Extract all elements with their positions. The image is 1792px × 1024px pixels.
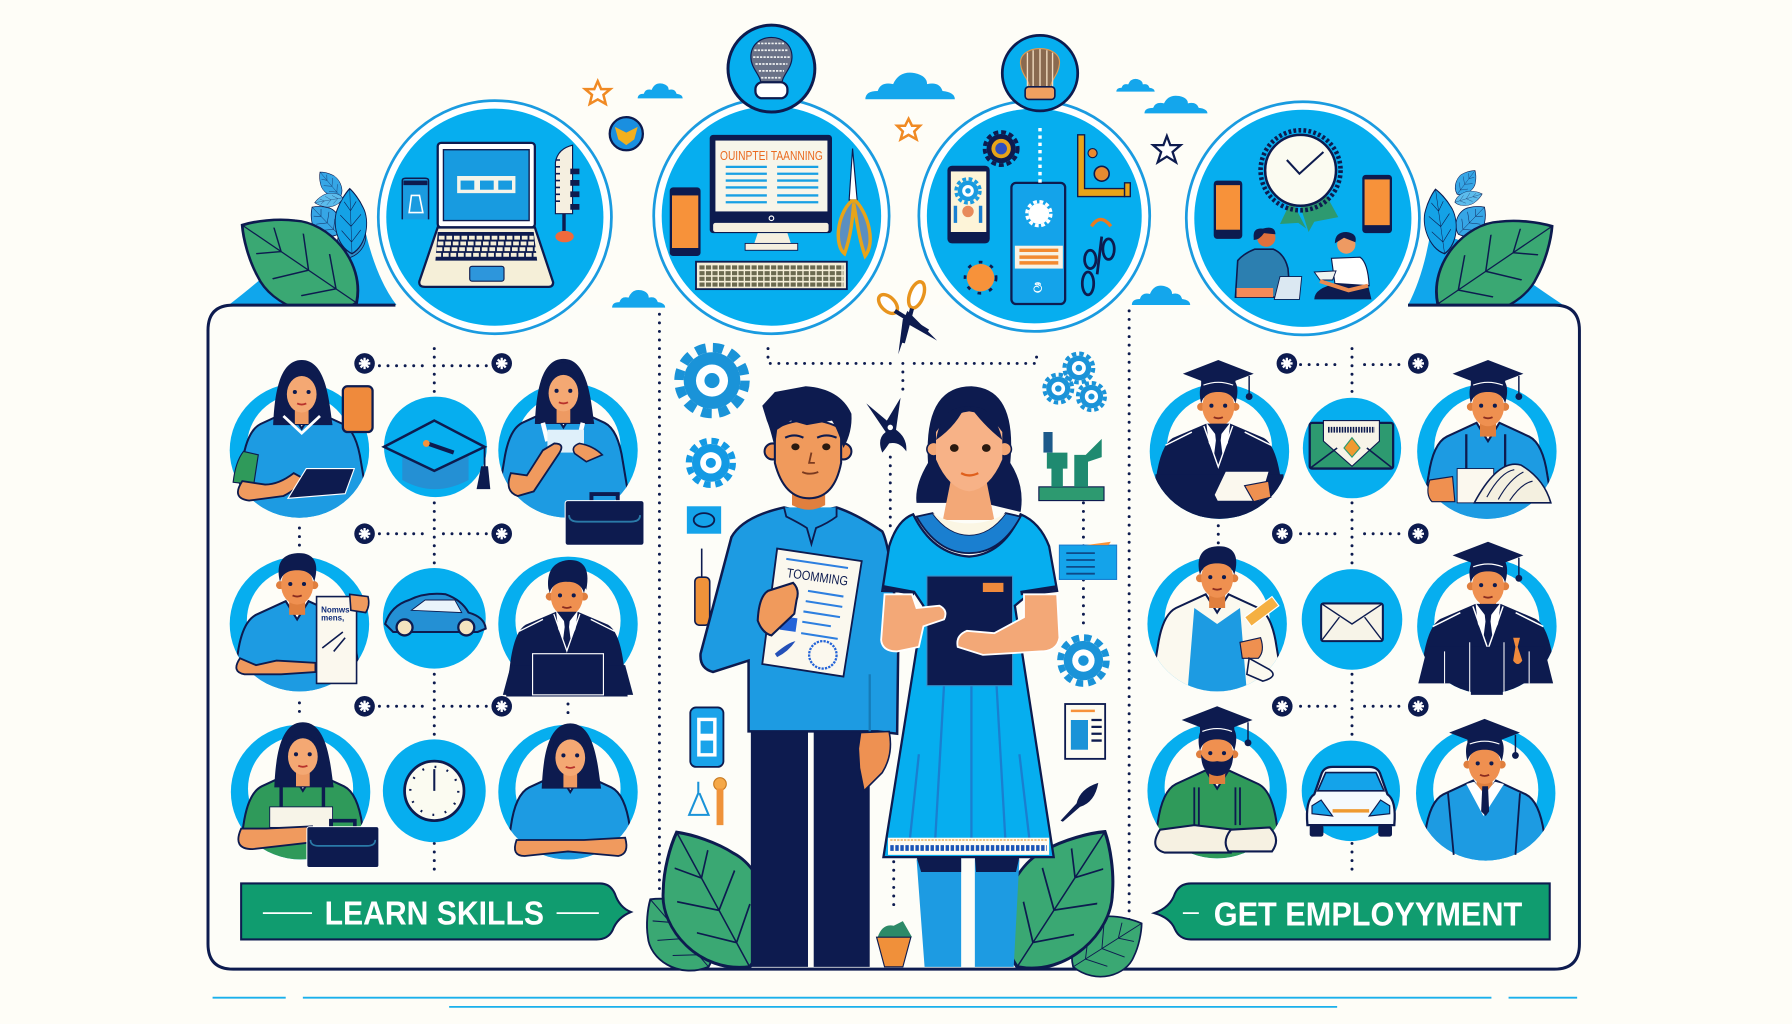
man head — [762, 386, 852, 510]
person: graduate in suit with notepad — [1150, 360, 1289, 520]
woman arms — [881, 594, 946, 651]
sleeve bands — [883, 587, 1057, 593]
dotted connectors — [299, 311, 1403, 931]
infographic canvas — [206, 24, 1581, 1008]
clippers icon — [866, 398, 906, 453]
woman hair — [916, 386, 1022, 512]
learn skills banner — [241, 883, 631, 939]
man trousers — [751, 731, 870, 967]
icon: wall clock — [383, 739, 486, 842]
monitor: OUINPTEI TAANNING — [720, 148, 823, 163]
training circle 2: desktop computer — [654, 98, 889, 334]
document — [1065, 704, 1105, 759]
orange phones — [1214, 175, 1392, 239]
person: graduate with open book — [1417, 360, 1557, 519]
certificate: TOOMMING — [786, 565, 849, 589]
woman neck — [943, 480, 994, 520]
person: man in suit with laptop — [498, 557, 638, 696]
tall phone: ටී — [1033, 281, 1043, 296]
flower pot — [877, 921, 912, 967]
person: woman with folded hands — [498, 723, 638, 860]
icon: green envelope — [1303, 398, 1401, 498]
man shirt — [700, 507, 898, 734]
woman dress — [882, 514, 1057, 857]
person: graduate in sweater vest — [1416, 718, 1556, 861]
top left leaf cluster — [219, 166, 397, 337]
woman character — [881, 386, 1059, 967]
machine — [1039, 432, 1104, 501]
laptop — [419, 143, 553, 287]
person: student in white coat with pencil — [1147, 546, 1287, 692]
training circle 3: mobile tools — [919, 101, 1150, 331]
man hands — [758, 583, 798, 635]
ruler tool — [555, 145, 579, 242]
orange gear — [965, 262, 996, 293]
top scissors — [875, 280, 937, 354]
dress border — [888, 838, 1049, 855]
icon: white envelope — [1302, 569, 1402, 670]
tablet — [927, 576, 1013, 686]
person: woman in apron with toolbox — [230, 722, 378, 867]
certificate — [762, 549, 862, 677]
man character — [700, 386, 898, 967]
keyboard — [696, 262, 847, 289]
phone — [670, 187, 701, 256]
radio — [1059, 542, 1117, 579]
connector flowers — [354, 353, 1429, 717]
tall phone — [1011, 183, 1065, 304]
paper: mens, — [321, 614, 344, 623]
person: woman with tablet and phone — [230, 360, 374, 518]
woman legs — [917, 859, 1019, 967]
learner with laptop — [1235, 228, 1302, 299]
icon: graduation cap — [384, 397, 490, 497]
small scissors — [1082, 219, 1114, 295]
feather — [1061, 783, 1098, 822]
person: graduate in dark suit — [1417, 542, 1558, 702]
person: bearded graduate with crossed arms — [1147, 706, 1287, 858]
small phone — [402, 178, 429, 219]
bulb badge 1 — [728, 25, 815, 112]
top right leaf cluster — [1408, 165, 1575, 338]
side icons: left of couple — [679, 348, 745, 825]
icon: front view car — [1302, 741, 1400, 841]
get employment column — [1147, 360, 1557, 861]
bulb badge 2 — [1002, 35, 1078, 111]
paper: Nomws — [321, 606, 350, 615]
phone with gear — [947, 166, 990, 243]
person: man pointing at paper — [230, 553, 370, 692]
training circle 4: clock and learners — [1186, 102, 1419, 335]
get employment banner — [1154, 883, 1550, 939]
icon: blue car — [383, 568, 486, 669]
pliers — [838, 149, 870, 256]
center bottom leaves — [626, 805, 1157, 994]
side icons: right of couple — [1039, 354, 1117, 822]
woman face — [927, 402, 1011, 491]
learner with tablet — [1314, 232, 1371, 299]
bottom rules — [213, 998, 1577, 1007]
get employment banner: GET EMPLOYYMENT — [1214, 897, 1522, 934]
learn skills column — [230, 359, 644, 912]
decorative clouds and stars — [585, 73, 1207, 308]
monitor — [710, 135, 832, 250]
clock medal — [1261, 130, 1341, 232]
learn skills banner: LEARN SKILLS — [325, 896, 544, 933]
person: woman with briefcase — [497, 359, 644, 547]
navy gear — [985, 132, 1018, 165]
training circle 1: laptop — [378, 101, 611, 334]
main panel outline — [208, 305, 1579, 969]
paper — [317, 594, 369, 683]
L-shaped tool — [1078, 135, 1130, 197]
